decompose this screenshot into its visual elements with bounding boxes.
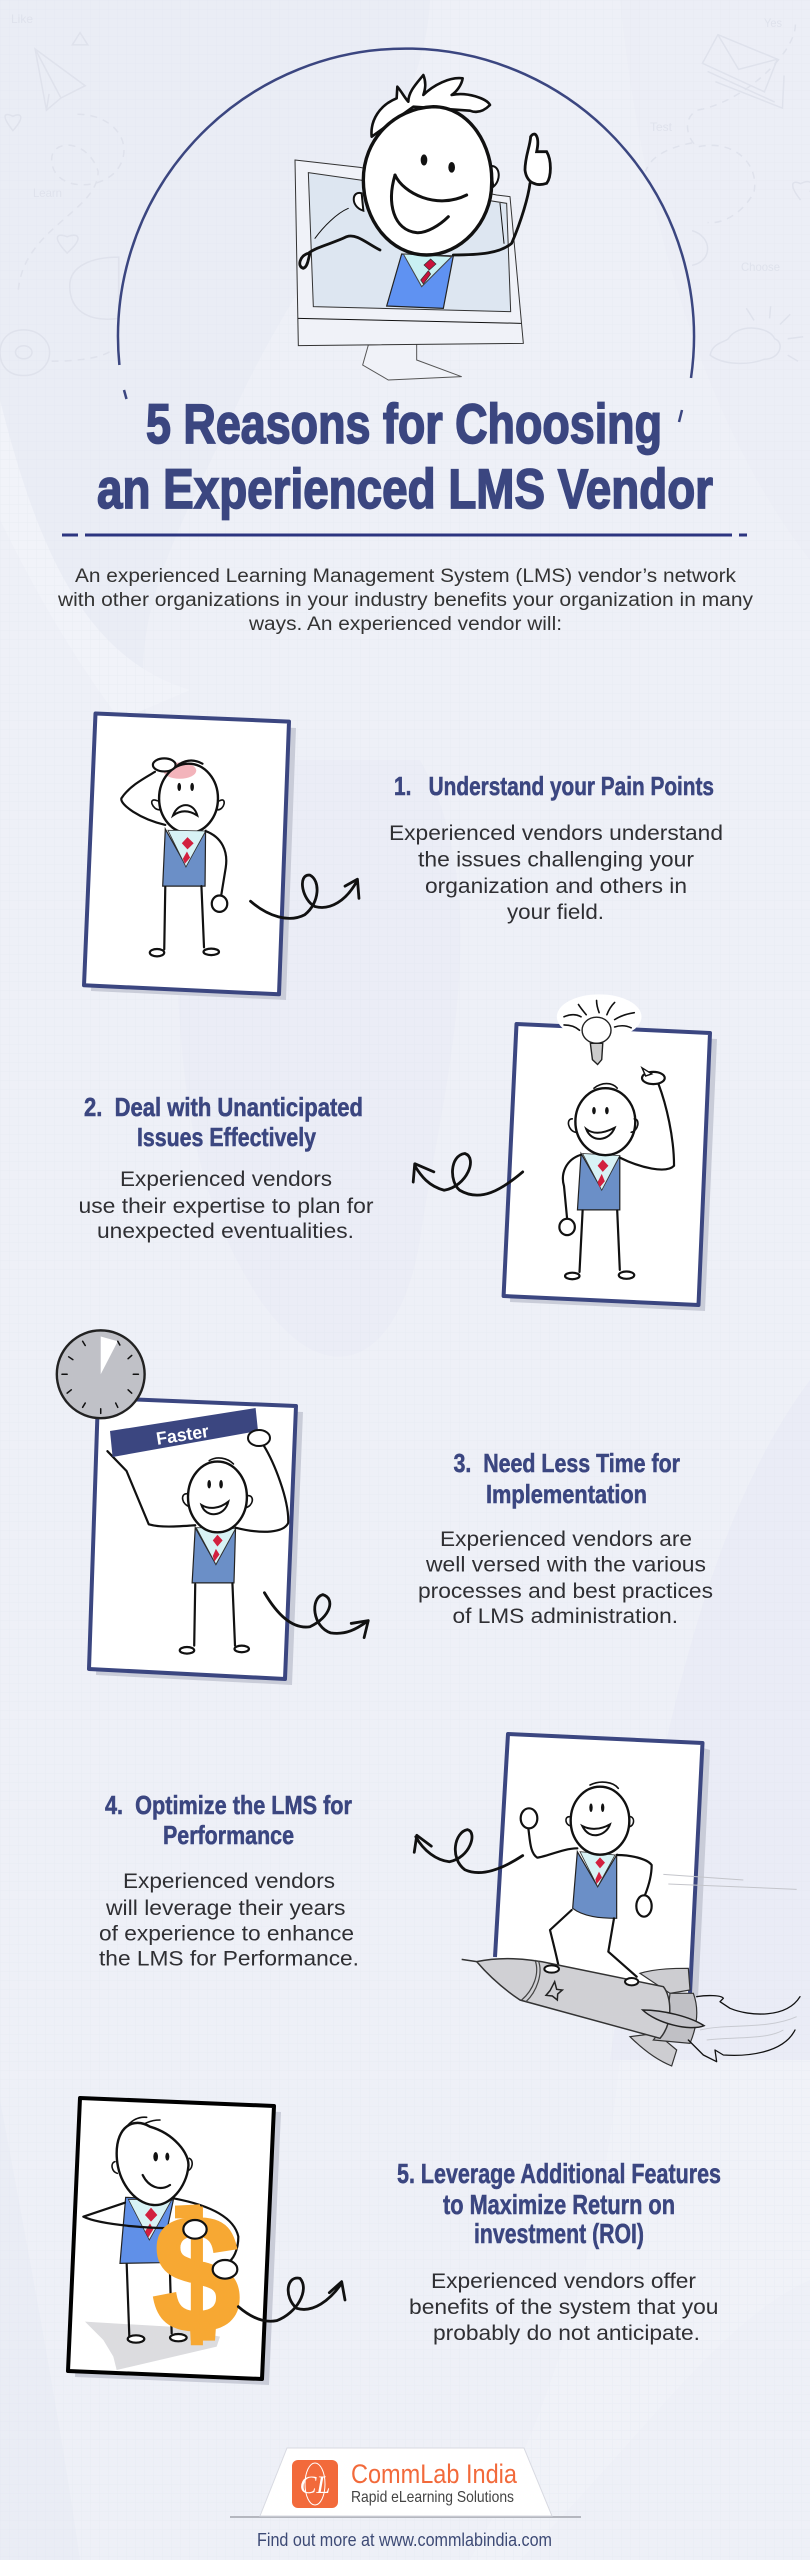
hair [371,75,490,137]
reason 4 heading: Performance [163,1820,294,1850]
panel: reason 5 [68,2098,721,2385]
brand name: CommLab India [351,2459,518,2489]
panel: reason 1 [84,714,723,1000]
reason 3 text: processes and best practices [418,1580,713,1603]
reason 4 text [99,1870,359,1971]
logo mark: CL [300,2472,330,2499]
title [97,392,713,520]
intro text: ways. An experienced vendor will: [248,614,562,635]
reason 5 heading: 5. Leverage Additional Features [397,2158,721,2189]
reason 2 heading [84,1092,363,1152]
reason 4 text: of experience to enhance [99,1923,354,1946]
reason 1 text [389,822,723,924]
title: 5 Reasons for Choosing [146,392,662,455]
panel: reason 2 [78,994,717,1311]
reason 4 heading: 4. Optimize the LMS for [105,1790,352,1820]
reason 1 heading: 1. Understand your Pain Points [394,771,714,801]
tagline: Rapid eLearning Solutions [351,2489,514,2506]
reason 1 card [84,714,296,1000]
doodle words: Test [650,120,673,134]
reason 2 figure: man with idea [557,994,674,1279]
reason 1 text: organization and others in [425,875,687,898]
reason 5 text: Experienced vendors offer [431,2270,696,2293]
intro text: An experienced Learning Management System (LMS) vendor’s network [75,566,737,587]
reason 5 figure: man behind dollar sign [83,2117,238,2370]
hands holding dollar sign [183,2220,237,2279]
reason 3 text: of LMS administration. [452,1605,678,1628]
reason 4 figure: man on rocket [462,1782,800,2066]
rocket [462,1959,800,2066]
doodle words: Yes [764,16,782,30]
reason 4 text: Experienced vendors [123,1870,335,1893]
reason 2 heading: Issues Effectively [137,1122,316,1152]
reason 3 text: well versed with the various [425,1554,706,1576]
reason 1 arrow [251,875,359,918]
reason 3 text [418,1528,713,1628]
footer link text: Find out more at www.commlabindia.com [257,2530,552,2550]
reason 5 card [68,2098,281,2385]
logo mark [292,2460,338,2508]
reason 2 text: unexpected eventualities. [97,1220,354,1243]
reason 2 text: Experienced vendors [120,1168,332,1191]
reason 2 arrow [413,1154,523,1195]
head [363,107,492,255]
reason 4 heading [105,1790,352,1850]
reason 3 card [89,1398,303,1685]
reason 3 heading: 3. Need Less Time for [454,1448,680,1478]
reason 3 heading [454,1448,680,1509]
reason 3 figure: man with banner [107,1445,288,1654]
reason 1 text: Experienced vendors understand [389,822,723,845]
arms and hands [300,183,530,268]
reason 1 text: the issues challenging your [418,848,694,872]
reason 2 text [78,1168,374,1243]
reason 5 text: benefits of the system that you [409,2296,718,2319]
reason 4 text: will leverage their years [105,1897,346,1920]
reason 2 card [504,1024,717,1311]
reason 2 text: use their expertise to plan for [78,1195,374,1218]
panel: reason 3 [57,1330,713,1685]
intro text: with other organizations in your industry benefits your organization in many [57,590,754,611]
reason 1 figure: confused man [121,758,227,956]
reason 4 text: the LMS for Performance. [99,1948,359,1971]
icon: dollar sign: $ [153,2182,240,2366]
doodle words: Learn [33,186,62,200]
monitor screen [308,173,511,312]
reason 5 text: probably do not anticipate. [433,2322,700,2345]
reason 3 arrow [264,1593,368,1638]
background doodles [0,24,810,376]
panel: reason 4 [99,1734,800,2066]
hero arc [118,49,694,422]
doodle words: Choose [741,260,780,274]
reason 4 arrow [414,1830,523,1873]
reason 4 card [495,1734,710,1998]
monitor body [295,160,523,346]
icon: clock [57,1330,145,1418]
reason 5 heading: investment (ROI) [474,2218,644,2249]
face [392,154,467,233]
vest and tie [387,254,453,308]
intro text [57,566,754,635]
doodle words: Like [11,12,33,26]
reason 5 arrow [238,2278,345,2321]
reason 3 heading: Implementation [486,1479,647,1509]
reason 5 heading [397,2158,721,2249]
ears [354,166,499,211]
reason 3 banner [110,1408,270,1457]
title rule [62,534,747,536]
reason 5 text [409,2270,718,2345]
footer logo plate [230,2448,581,2517]
monitor stand [363,343,462,380]
reason 5 heading: to Maximize Return on [443,2189,675,2220]
reason 2 heading: 2. Deal with Unanticipated [84,1092,363,1122]
reason 1 text: your field. [507,901,604,924]
reason 3 text: Experienced vendors are [440,1528,692,1551]
doodle words [11,12,782,274]
reason 3 banner: Faster [155,1421,210,1449]
hero character in monitor [295,75,550,380]
